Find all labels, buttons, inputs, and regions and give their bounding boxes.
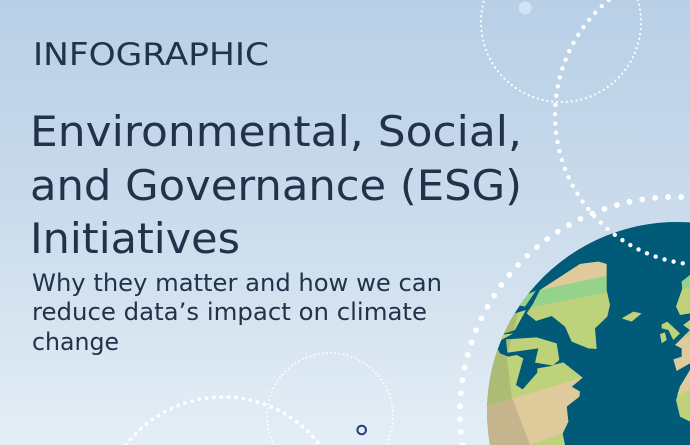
title: Environmental, Social, [30, 107, 522, 156]
north america [483, 291, 583, 445]
subtitle: reduce data’s impact on climate [32, 298, 427, 326]
iceland [622, 312, 642, 322]
shaded limb [487, 305, 530, 445]
small ring [357, 426, 366, 434]
label: infographic: INFOGRAPHIC [33, 37, 269, 73]
greenland [527, 262, 610, 349]
dotted ring around globe [460, 197, 690, 445]
dotted circle: top thin [481, 0, 641, 102]
dotted circle: bottom left [126, 397, 320, 445]
subtitle: change [32, 328, 119, 356]
europe [673, 320, 690, 371]
title: and Governance (ESG) [30, 161, 522, 210]
dotted circle: top right large [555, 0, 690, 264]
decorative pale dot [518, 2, 532, 14]
dotted circle: bottom thin [267, 353, 393, 445]
subtitle [32, 269, 442, 356]
scandinavia [676, 275, 690, 315]
title: Initiatives [30, 214, 240, 263]
land masses [483, 262, 690, 445]
british isles [660, 322, 680, 343]
africa [676, 370, 690, 422]
icon: globe [483, 222, 690, 445]
subtitle: Why they matter and how we can [32, 269, 442, 297]
title [30, 107, 522, 263]
